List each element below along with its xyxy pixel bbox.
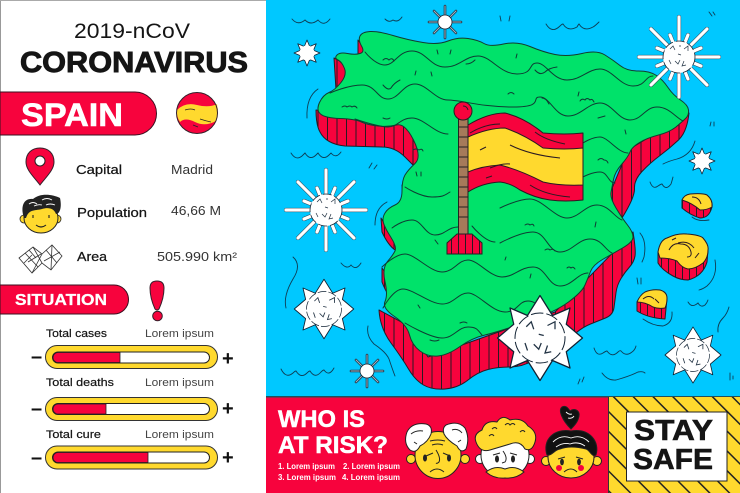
label: Population: Population — [77, 205, 147, 220]
island: middle — [637, 290, 667, 319]
panel: who is at risk — [266, 396, 740, 493]
virus: top right large — [639, 17, 719, 97]
stat: total cure: Lorem ipsum — [145, 429, 214, 441]
risk list — [278, 462, 400, 482]
flag of Spain on map — [447, 102, 583, 254]
icon: map pin — [26, 148, 54, 185]
risk list: 1. Lorem ipsum — [278, 462, 335, 471]
stat: total deaths: Total deaths — [46, 377, 115, 389]
stay safe sign — [626, 412, 727, 481]
risk list: 2. Lorem ipsum — [343, 462, 400, 471]
stat: total cure — [31, 429, 234, 469]
subtitle: 2019-nCoV: 2019-nCoV — [74, 20, 190, 43]
label: Capital: Capital — [76, 162, 122, 177]
icon: Spain flag globe — [176, 92, 218, 134]
stat: total deaths: Lorem ipsum — [145, 377, 214, 389]
face: child with hair bun — [542, 406, 602, 478]
value: area in km2: 505.990 km² — [157, 249, 238, 264]
stat: total cases: Total cases — [46, 328, 108, 340]
island: small — [682, 194, 712, 218]
virus: southeast star — [665, 327, 721, 383]
heading: who is at risk: AT RISK? — [278, 432, 388, 459]
stat: total deaths — [31, 377, 234, 420]
stat: total deaths: + — [222, 398, 234, 420]
country banner: Spain: SPAIN — [21, 97, 123, 133]
stat: total deaths: – — [31, 398, 42, 420]
virus: small east — [689, 148, 715, 174]
risk list: 3. Lorem ipsum — [278, 473, 336, 482]
flag pole — [454, 102, 472, 236]
flag base — [447, 234, 482, 254]
viruses — [286, 6, 721, 387]
face: elderly person — [406, 423, 470, 478]
panel: sea background — [266, 0, 740, 397]
virus: small northwest — [294, 40, 320, 66]
heading: who is at risk: WHO IS — [278, 406, 365, 433]
banner: situation — [0, 285, 128, 314]
stat: total cure: – — [31, 447, 42, 469]
map contour lines — [330, 50, 683, 341]
stat: total cases — [31, 328, 234, 370]
stat: total cases: Lorem ipsum — [145, 328, 214, 340]
stat: total cure: + — [222, 447, 234, 469]
sea waves and squiggles — [281, 12, 733, 384]
stat: total cases: – — [31, 346, 42, 368]
virus: small top — [429, 6, 461, 38]
value: 46,66 M: 46,66 M — [171, 203, 221, 218]
title: CORONAVIRUS: CORONAVIRUS — [20, 47, 248, 79]
map side walls — [316, 40, 689, 389]
heading: who is at risk — [278, 406, 388, 459]
value: Madrid: Madrid — [171, 162, 213, 177]
icon: person face — [20, 195, 61, 233]
risk list: 4. Lorem ipsum — [342, 473, 400, 482]
map top surface — [318, 31, 689, 356]
virus: west star — [294, 279, 354, 339]
island: large — [658, 234, 708, 280]
map: Spain island — [316, 31, 689, 389]
stay safe sign: SAFE — [633, 444, 713, 476]
panel: stay safe — [608, 397, 740, 493]
virus: left large — [286, 170, 366, 250]
label: Area: Area — [77, 249, 108, 264]
stat: total cure: Total cure — [46, 429, 101, 441]
face: bearded person — [475, 417, 536, 478]
virus: small south — [351, 355, 383, 387]
panel: info sidebar — [0, 0, 266, 493]
islands — [637, 194, 712, 319]
icon: exclamation mark — [150, 281, 164, 321]
stay safe sign: STAY — [634, 415, 713, 447]
banner: situation: SITUATION — [15, 292, 107, 309]
virus: south big star — [498, 296, 582, 380]
stat: total cases: + — [222, 348, 234, 370]
flag cloth — [468, 113, 583, 201]
icon: folded map — [19, 245, 62, 273]
country banner: Spain — [0, 92, 156, 135]
